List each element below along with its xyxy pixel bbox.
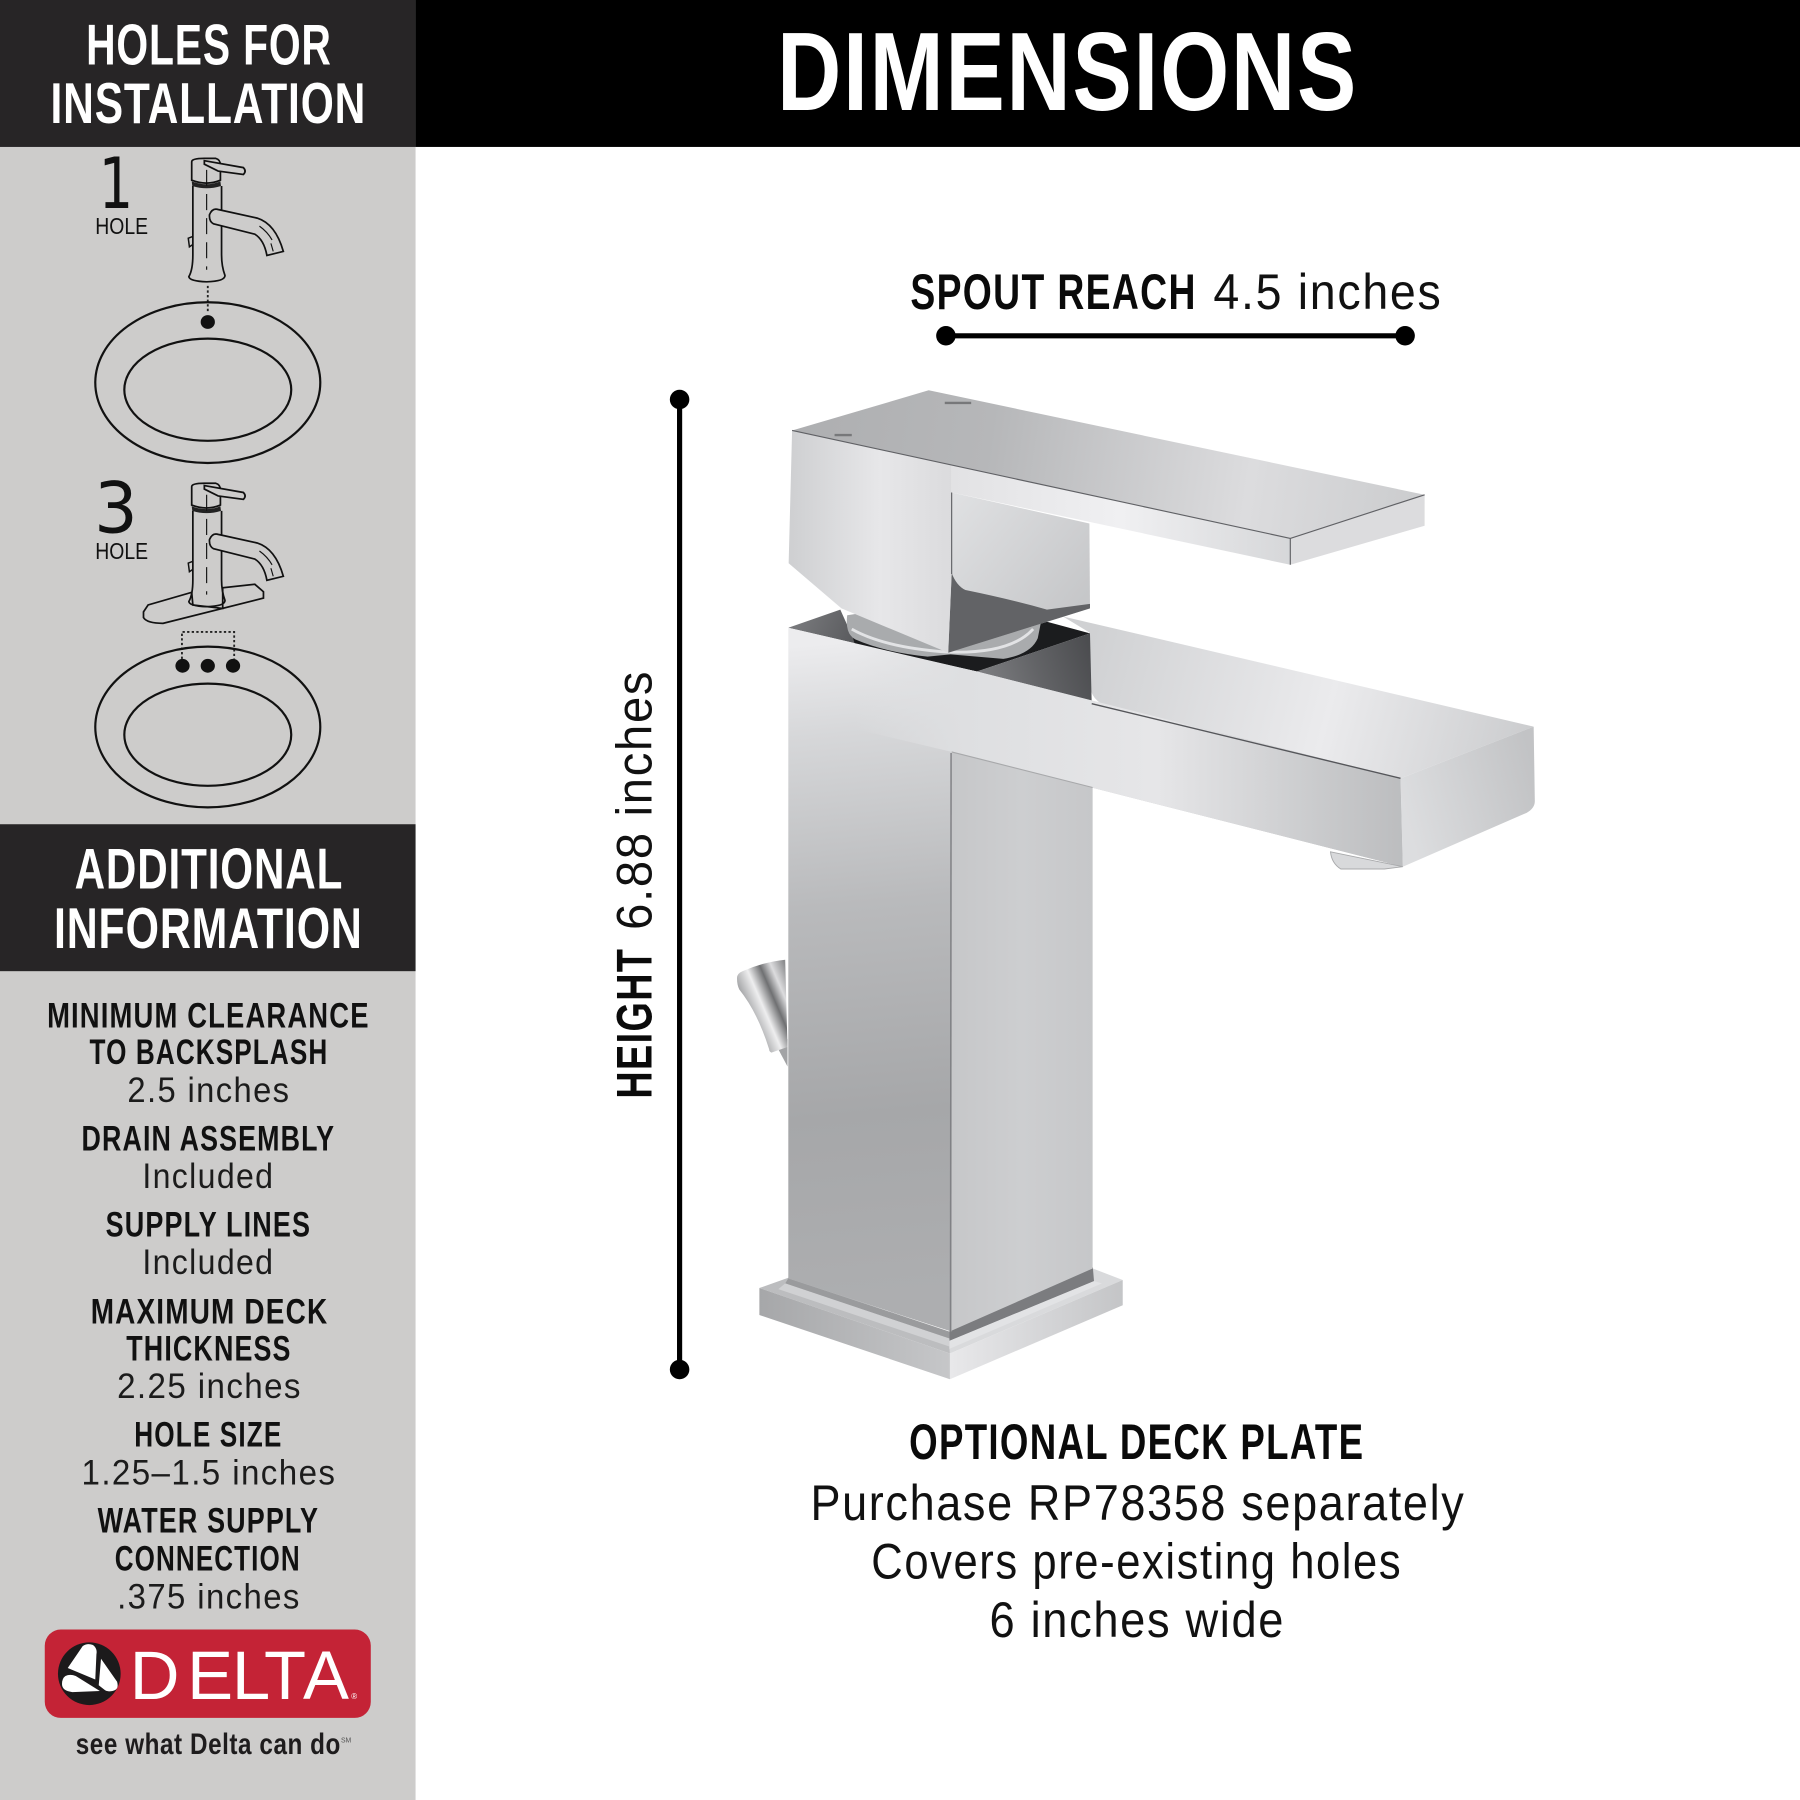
corner edge line bbox=[950, 753, 952, 1332]
label: height bbox=[605, 670, 662, 1099]
heading band: additional information: ADDITIONAL bbox=[75, 838, 343, 902]
diagram: three hole installation: 3 bbox=[94, 468, 138, 550]
tagline: see what Delta can do bbox=[76, 1728, 341, 1761]
text block: optional deck plate: 6 inches wide bbox=[990, 1591, 1285, 1648]
lever edges bbox=[792, 430, 1425, 574]
lever indicator marks bbox=[835, 403, 971, 435]
text block: optional deck plate bbox=[810, 1413, 1465, 1648]
dimension line: spout reach bbox=[936, 326, 1415, 346]
diagram: one hole installation: HOLE bbox=[95, 213, 148, 239]
label: height: 6.88 inches bbox=[605, 670, 662, 930]
text block: additional information list: SUPPLY LINES bbox=[106, 1204, 311, 1244]
text block: additional information list: TO BACKSPLASH bbox=[90, 1032, 328, 1072]
text block: additional information list: Included bbox=[142, 1156, 274, 1196]
label: height: HEIGHT bbox=[605, 948, 662, 1099]
text block: additional information list: CONNECTION bbox=[115, 1538, 301, 1578]
heading band: holes for installation: INSTALLATION bbox=[51, 72, 366, 136]
tagline: SM bbox=[341, 1738, 352, 1745]
text block: additional information list: 2.25 inches bbox=[117, 1366, 302, 1406]
text block: additional information list bbox=[47, 995, 370, 1616]
heading band: holes for installation: HOLES FOR bbox=[86, 13, 332, 77]
lever end face bbox=[1290, 495, 1425, 565]
valve collar bbox=[847, 599, 1041, 659]
panel: left sidebar background bbox=[0, 0, 416, 1800]
spout edge bbox=[1092, 704, 1401, 778]
heading band: holes for installation bbox=[0, 0, 416, 147]
aerator bbox=[1330, 852, 1403, 869]
text block: additional information list: HOLE SIZE bbox=[134, 1414, 282, 1454]
text block: additional information list: 1.25–1.5 inches bbox=[82, 1452, 336, 1492]
column right face bbox=[949, 752, 1093, 1332]
lever block left face bbox=[789, 430, 952, 653]
text block: additional information list: .375 inches bbox=[117, 1576, 301, 1616]
base plate bbox=[759, 1267, 1123, 1379]
heading band: dimensions: DIMENSIONS bbox=[777, 9, 1358, 134]
body front face bbox=[788, 628, 1403, 1332]
text block: additional information list: DRAIN ASSEMBLY bbox=[82, 1118, 335, 1158]
lever top plate bbox=[792, 390, 1425, 538]
logo: delta: ® bbox=[351, 1692, 357, 1701]
polished dark reflection bbox=[977, 633, 1092, 704]
collar highlight bbox=[852, 629, 1033, 652]
logo: delta: DELTA bbox=[130, 1637, 349, 1714]
spout front face bbox=[855, 644, 1403, 867]
body top rim bbox=[788, 610, 977, 672]
dimension line: height bbox=[670, 390, 689, 1379]
pop-up knob bbox=[737, 960, 788, 1066]
text block: optional deck plate: Covers pre-existing holes bbox=[871, 1532, 1402, 1589]
diagram: three hole installation: HOLE bbox=[95, 538, 148, 564]
diagram: one hole installation: 1 bbox=[99, 143, 133, 225]
lever front strip bbox=[952, 465, 1290, 565]
label: spout reach: 4.5 inches bbox=[1213, 263, 1442, 320]
spout top surface bbox=[1063, 616, 1534, 778]
label: spout reach: SPOUT REACH bbox=[910, 263, 1197, 320]
text block: additional information list: MAXIMUM DECK bbox=[91, 1292, 328, 1332]
recess bbox=[847, 620, 1090, 672]
faucet photo bbox=[737, 390, 1535, 1379]
text block: optional deck plate: OPTIONAL DECK PLATE bbox=[909, 1413, 1364, 1470]
text block: additional information list: 2.5 inches bbox=[127, 1070, 290, 1110]
lever underside shadow bbox=[948, 573, 1090, 653]
heading band: additional information bbox=[0, 824, 416, 971]
text block: optional deck plate: Purchase RP78358 separately bbox=[810, 1474, 1465, 1531]
underside edge bbox=[952, 752, 1093, 788]
logo: delta bbox=[45, 1630, 371, 1718]
diagram: three hole installation bbox=[94, 468, 320, 807]
text block: additional information list: THICKNESS bbox=[126, 1328, 292, 1368]
text block: additional information list: WATER SUPPLY bbox=[98, 1501, 319, 1541]
lever block right face bbox=[948, 492, 1090, 653]
text block: additional information list: Included bbox=[142, 1242, 274, 1282]
heading band: additional information: INFORMATION bbox=[54, 897, 363, 961]
heading band: dimensions bbox=[416, 0, 1800, 147]
spout end face bbox=[1401, 727, 1535, 867]
diagram: one hole installation bbox=[95, 143, 320, 463]
text block: additional information list: MINIMUM CLEARANCE bbox=[47, 995, 370, 1035]
